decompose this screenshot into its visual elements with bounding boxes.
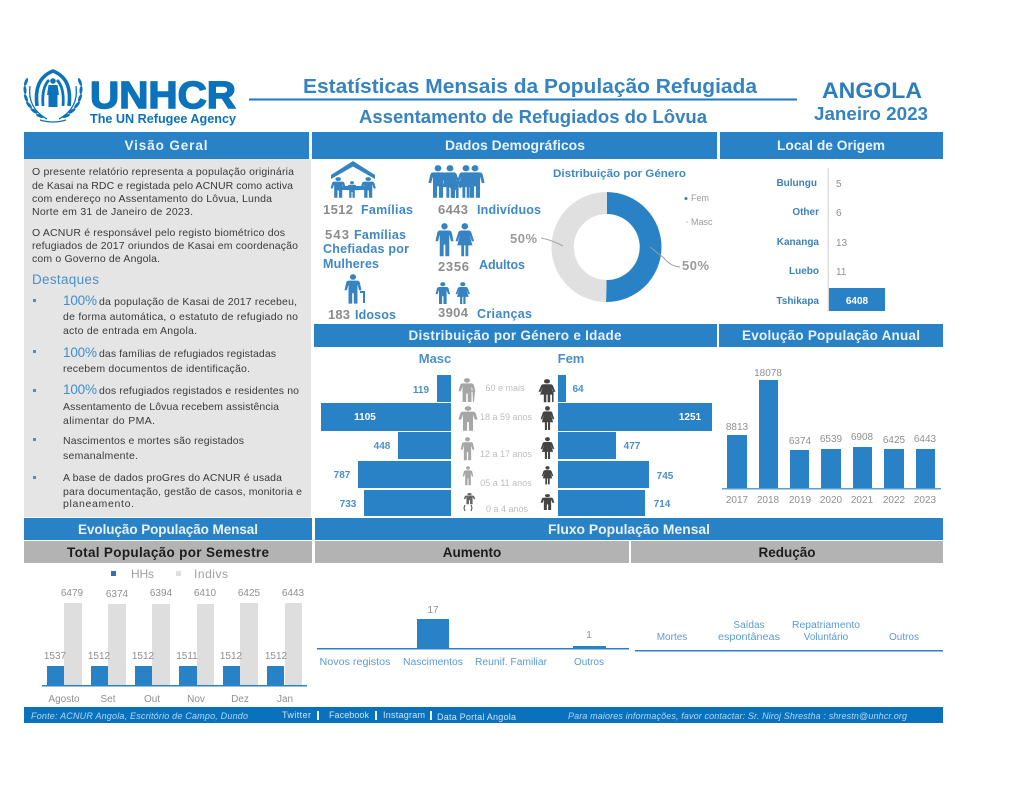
bar chart: monthly totals: 1512 bbox=[265, 651, 288, 662]
heading bbox=[719, 324, 943, 347]
bar chart: annual population: 2017 bbox=[726, 495, 749, 506]
heading bbox=[24, 518, 312, 540]
text block: highlights: 100% bbox=[63, 345, 97, 360]
bar chart: aumento: 1 bbox=[586, 630, 592, 641]
date: Janeiro 2023 bbox=[814, 104, 928, 124]
logo: UNHCR: UNHCR bbox=[90, 75, 236, 117]
text block: highlights bbox=[33, 293, 302, 510]
bar chart: monthly totals: 1512 bbox=[88, 651, 111, 662]
chart: origin bars: 6 bbox=[836, 208, 842, 219]
footer: Para maiores informações, favor contactar: Sr. Niroj Shrestha : shrestn@unhcr.org bbox=[568, 711, 907, 721]
text block: highlights: 100% bbox=[63, 382, 97, 397]
bar chart: monthly totals: 6443 bbox=[282, 588, 305, 599]
bar chart: redução: Outros bbox=[889, 632, 919, 643]
legend: Masc bbox=[691, 217, 713, 227]
heading: Distribuição por Género e Idade bbox=[408, 328, 622, 343]
age labels: 05 a 11 anos bbox=[480, 478, 532, 488]
footer: Fonte: ACNUR Angola, Escritório de Campo, Dundo bbox=[31, 711, 248, 721]
bar chart: redução: Voluntário bbox=[804, 632, 849, 643]
legend: HHs bbox=[131, 567, 154, 581]
text block: highlights: semanalmente. bbox=[63, 450, 138, 462]
stat: famílias chefiadas por mulheres: 543 bbox=[325, 227, 349, 242]
stat: adultos bbox=[438, 258, 525, 274]
bar chart: annual population: 2021 bbox=[851, 495, 874, 506]
chart: origin bars: 5 bbox=[836, 179, 842, 190]
values: 1251 bbox=[679, 412, 702, 423]
donut bbox=[552, 192, 661, 302]
bar chart: monthly totals: 1512 bbox=[132, 651, 155, 662]
text block: intro: com o Governo de Angola. bbox=[32, 253, 160, 265]
chart: origin bars: Other bbox=[792, 207, 819, 218]
bar chart: aumento: Nascimentos bbox=[403, 657, 463, 668]
title: Estatísticas Mensais da População Refugiada bbox=[303, 76, 758, 98]
bar chart: monthly totals: Dez bbox=[231, 694, 249, 705]
bar chart: redução bbox=[635, 620, 943, 652]
subheading bbox=[24, 541, 312, 563]
bar chart: annual population: 2018 bbox=[757, 495, 780, 506]
bar chart: aumento bbox=[317, 605, 629, 668]
text block: highlights: 100% bbox=[63, 293, 97, 308]
panel: evolução população anual bbox=[719, 324, 943, 506]
icons: female age groups bbox=[539, 379, 555, 510]
values: 477 bbox=[624, 441, 641, 452]
subtitle: Assentamento de Refugiados do Lôvua bbox=[359, 107, 708, 127]
values: 448 bbox=[374, 441, 391, 452]
stat: idosos: Idosos bbox=[355, 308, 396, 322]
age labels bbox=[480, 383, 533, 514]
heading: local de origem: Local de Origem bbox=[777, 138, 885, 153]
label: fem: Fem bbox=[558, 351, 584, 366]
chart: origin bars: 11 bbox=[836, 267, 847, 278]
bar chart: aumento: 17 bbox=[427, 605, 439, 616]
stat: idosos: 183 bbox=[328, 307, 350, 322]
age labels: 0 a 4 anos bbox=[486, 504, 529, 514]
bar chart: annual population: 18078 bbox=[754, 368, 782, 379]
bar chart: monthly totals: Out bbox=[144, 694, 160, 705]
stat: indivíduos: Indivíduos bbox=[477, 203, 541, 217]
chart: origin bars: Luebo bbox=[789, 266, 819, 277]
bar chart: annual population: 6425 bbox=[883, 435, 906, 446]
text block: highlights: planeamento. bbox=[63, 498, 134, 510]
bar chart: annual population: 2020 bbox=[820, 495, 843, 506]
stat: adultos: 2356 bbox=[438, 259, 469, 274]
text block: intro: refugiados de 2017 oriundos de Kasai em coordenação bbox=[32, 240, 298, 252]
subheading: redução: Redução bbox=[758, 545, 816, 560]
chart: distribuição por género: Distribuição por Género bbox=[553, 168, 686, 180]
chart: origin bars: 13 bbox=[836, 238, 848, 249]
heading: dados demográficos bbox=[312, 132, 717, 159]
text block: highlights: dos refugiados registados e residentes no bbox=[99, 385, 299, 397]
text block: highlights: recebem documentos de identificação. bbox=[63, 363, 250, 375]
stat: famílias chefiadas por mulheres: Chefiadas por bbox=[323, 242, 409, 256]
age labels: 60 e mais bbox=[485, 383, 525, 393]
heading: Evolução População Anual bbox=[742, 328, 920, 343]
text block: highlights: Nascimentos e mortes são registados bbox=[63, 435, 244, 447]
values: 64 bbox=[572, 384, 584, 395]
icon: UNHCR emblem bbox=[23, 71, 83, 122]
values bbox=[334, 384, 702, 510]
logo: UNHCR: The UN Refugee Agency bbox=[90, 111, 237, 126]
bar chart: redução: Mortes bbox=[657, 632, 687, 643]
text block: highlights: A base de dados proGres do ACNUR é usada bbox=[63, 472, 282, 484]
stat: famílias chefiadas por mulheres: Famílias bbox=[354, 228, 406, 242]
subheading: aumento bbox=[315, 541, 629, 563]
icon: elderly bbox=[345, 274, 365, 304]
text block: highlights: Assentamento de Lôvua recebem assistência bbox=[63, 401, 279, 413]
stat: crianças: 3904 bbox=[438, 305, 469, 320]
chart: origin bars: Tshikapa bbox=[776, 296, 819, 307]
footer bbox=[24, 707, 943, 723]
stat: idosos bbox=[328, 307, 396, 322]
text block: highlights: alimentar do PMA. bbox=[63, 415, 155, 427]
values: 745 bbox=[657, 471, 674, 482]
stat: famílias chefiadas por mulheres: Mulheres bbox=[323, 257, 379, 271]
bar chart: monthly totals: 6479 bbox=[61, 588, 84, 599]
heading: destaques: Destaques bbox=[32, 272, 99, 287]
stat: crianças bbox=[438, 305, 532, 321]
bar chart: annual population: 6374 bbox=[789, 436, 812, 447]
chart: distribuição por género: 50% bbox=[510, 231, 537, 246]
icon: adults bbox=[435, 223, 474, 256]
bar chart: monthly totals: 6410 bbox=[194, 588, 217, 599]
panel: dados demográficos bbox=[312, 132, 717, 322]
bar chart: redução: Repatriamento bbox=[792, 620, 860, 631]
legend: Indivs bbox=[194, 567, 228, 581]
footer: Twitter bbox=[282, 710, 311, 720]
bar chart: monthly totals: Agosto bbox=[48, 694, 80, 705]
bar chart: aumento: Novos registos bbox=[320, 657, 390, 668]
stat: indivíduos: 6443 bbox=[438, 202, 468, 217]
text block: highlights: acto de entrada em Angola. bbox=[63, 325, 197, 337]
stat: adultos: Adultos bbox=[479, 258, 525, 272]
values: 733 bbox=[340, 499, 357, 510]
stat: famílias chefiadas por mulheres bbox=[323, 227, 409, 271]
legend bbox=[684, 193, 713, 227]
chart: female bars bbox=[558, 375, 712, 516]
bar chart: aumento: Reunif. Familiar bbox=[475, 657, 548, 668]
stat: indivíduos bbox=[438, 202, 541, 217]
bar chart: annual population: 8813 bbox=[726, 422, 749, 433]
bar chart: annual population: 2022 bbox=[883, 495, 906, 506]
text block: highlights: das famílias de refugiados registadas bbox=[99, 348, 276, 360]
heading: visão geral: Visão Geral bbox=[124, 138, 208, 153]
subheading: redução bbox=[631, 541, 943, 563]
heading: dados demográficos: Dados Demográficos bbox=[445, 138, 585, 153]
chart: origin bars: Kananga bbox=[777, 237, 819, 248]
heading: Fluxo População Mensal bbox=[548, 522, 710, 537]
title rule bbox=[249, 98, 797, 100]
chart: distribuição por género: 50% bbox=[682, 258, 709, 273]
stat: famílias: Famílias bbox=[361, 203, 413, 217]
bar chart: annual population bbox=[722, 368, 941, 506]
bar chart: monthly totals: 6425 bbox=[238, 588, 261, 599]
bar chart: redução: espontâneas bbox=[718, 632, 780, 643]
bar chart: annual population: 6539 bbox=[820, 434, 843, 445]
chart: origin bars: 6408 bbox=[846, 296, 869, 307]
stat: famílias: 1512 bbox=[323, 202, 353, 217]
chart: origin bars bbox=[776, 168, 885, 311]
bar chart: annual population: 2019 bbox=[789, 495, 812, 506]
subheading: aumento: Aumento bbox=[443, 545, 501, 560]
bar chart: monthly totals: 1512 bbox=[220, 651, 243, 662]
bar chart: monthly totals: 6394 bbox=[150, 588, 173, 599]
stat: famílias bbox=[323, 202, 413, 217]
bar chart: annual population: 2023 bbox=[914, 495, 937, 506]
bar chart: monthly totals: Nov bbox=[187, 694, 205, 705]
heading: visão geral bbox=[24, 132, 309, 159]
chart: distribuição por género bbox=[510, 168, 713, 302]
bar chart: monthly totals bbox=[42, 588, 307, 705]
subheading: Total População por Semestre bbox=[67, 545, 269, 560]
bar chart: monthly totals: 6374 bbox=[106, 589, 129, 600]
icons: male age groups bbox=[458, 378, 478, 511]
text block: intro: O presente relatório representa a população originária bbox=[32, 166, 294, 178]
text block: intro bbox=[32, 166, 298, 265]
age labels: 12 a 17 anos bbox=[480, 449, 533, 459]
panel: visão geral bbox=[24, 132, 311, 517]
footer: Instagram bbox=[383, 710, 425, 720]
stat: crianças: Crianças bbox=[477, 307, 532, 321]
bar chart: annual population: 6908 bbox=[851, 432, 874, 443]
chart: origin bars: Bulungu bbox=[776, 178, 817, 189]
text block: intro: de Kasai na RDC e registada pelo ACNUR como activa bbox=[32, 180, 293, 192]
bar chart: monthly totals: 1537 bbox=[44, 651, 67, 662]
heading: Evolução População Mensal bbox=[78, 522, 258, 537]
chart: male bars bbox=[321, 375, 451, 516]
heading bbox=[315, 518, 943, 540]
icon: children bbox=[436, 282, 470, 304]
footer: Facebook bbox=[329, 710, 370, 720]
legend: Fem bbox=[691, 193, 709, 203]
values: 714 bbox=[654, 499, 671, 510]
values: 119 bbox=[413, 385, 430, 396]
bar chart: annual population: 6443 bbox=[914, 434, 937, 445]
text block: highlights: para documentação, gestão de casos, monitoria e bbox=[63, 486, 302, 498]
values: 787 bbox=[334, 470, 351, 481]
values: 1105 bbox=[354, 412, 376, 423]
bar chart: monthly totals: 1511 bbox=[176, 651, 198, 662]
heading: local de origem bbox=[720, 132, 943, 159]
bar chart: monthly totals: Set bbox=[100, 694, 116, 705]
text block: intro: Norte em 31 de Janeiro de 2023. bbox=[32, 206, 193, 218]
heading bbox=[314, 324, 717, 347]
bar chart: aumento: Outros bbox=[574, 657, 604, 668]
legend bbox=[111, 567, 228, 581]
text block: highlights: de forma automática, o estatuto de refugiado no bbox=[63, 311, 298, 323]
icon: individuals bbox=[428, 165, 485, 198]
logo: UNHCR bbox=[23, 71, 237, 126]
country: ANGOLA bbox=[822, 78, 922, 103]
bar chart: monthly totals: Jan bbox=[277, 694, 293, 705]
panel: distribuição por género e idade bbox=[314, 324, 717, 516]
panel: evolução população mensal bbox=[24, 518, 312, 705]
bar chart: redução: Saídas bbox=[733, 620, 765, 631]
panel: local de origem bbox=[720, 132, 943, 311]
icon: families bbox=[331, 161, 376, 198]
text block: intro: O ACNUR é responsável pelo registo biométrico dos bbox=[32, 227, 285, 239]
text block: highlights: da população de Kasai de 2017 recebeu, bbox=[99, 296, 297, 308]
age labels: 18 a 59 anos bbox=[480, 412, 533, 422]
text block: intro: com endereço no Assentamento do Lôvua, Lunda bbox=[32, 193, 272, 205]
panel: fluxo população mensal bbox=[315, 518, 943, 668]
footer: Data Portal Angola bbox=[437, 712, 516, 722]
label: masc: Masc bbox=[419, 351, 451, 366]
